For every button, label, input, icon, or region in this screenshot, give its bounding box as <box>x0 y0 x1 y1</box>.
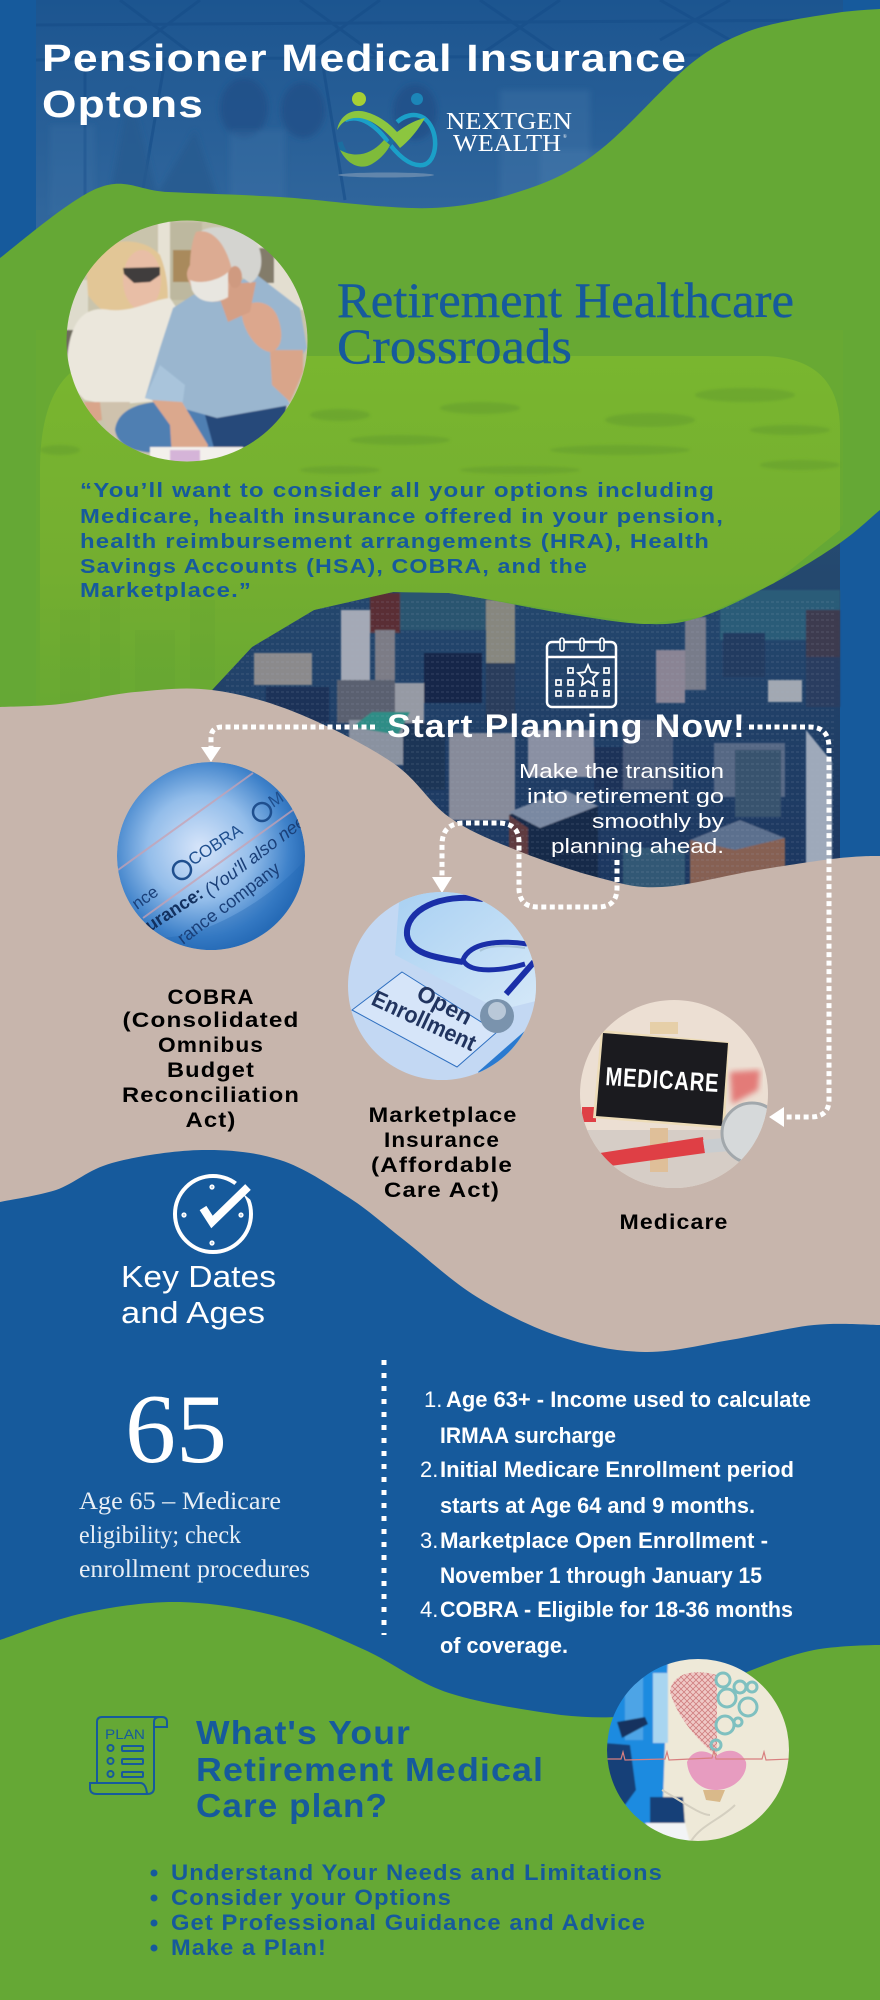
bulleted plan list <box>150 1860 663 1960</box>
key dates list: IRMAA surcharge <box>440 1423 616 1448</box>
quote text <box>80 479 724 602</box>
photo: COBRA form: nce <box>128 882 162 913</box>
quote text: Marketplace.” <box>80 579 252 602</box>
dotted arrow: to Medicare <box>749 727 829 1127</box>
photo: open enrollment <box>345 890 540 1085</box>
dotted divider <box>382 1360 386 1635</box>
key dates list: 4. <box>420 1597 438 1622</box>
heading: What's Your Retirement Medical Care plan?: What's Your <box>196 1714 411 1751</box>
bulleted plan list: Get Professional Guidance and Advice <box>171 1910 646 1935</box>
key dates list: 1. <box>424 1387 442 1412</box>
header stage photo with blue tint <box>36 0 843 265</box>
icon: plan scroll <box>90 1717 167 1794</box>
bulleted plan list: Make a Plan! <box>171 1935 327 1960</box>
text: planning ahead: smoothly by <box>592 811 724 833</box>
photo: COBRA form: M <box>265 788 287 811</box>
icon: plan scroll: PLAN <box>105 1726 145 1742</box>
beige wave panel <box>0 688 880 1370</box>
logo: NextGen Wealth <box>337 92 572 178</box>
label: Marketplace Insurance: Marketplace <box>368 1104 518 1127</box>
title: Pensioner Medical Insurance <box>42 38 687 80</box>
key dates list: starts at Age 64 and 9 months. <box>440 1493 755 1518</box>
translucent rounded panel with cloud streaks <box>40 356 840 710</box>
label: Marketplace Insurance: Care Act) <box>384 1179 500 1202</box>
text: age 65 note: enrollment procedures <box>79 1556 310 1583</box>
photo: COBRA form: rance company <box>173 858 284 948</box>
quote text: Medicare, health insurance offered in your pension, <box>80 505 724 528</box>
key dates list: Age 63+ - Income used to calculate <box>446 1387 811 1412</box>
label: Marketplace Insurance <box>368 1104 518 1202</box>
quote text: Savings Accounts (HSA), COBRA, and the <box>80 555 588 578</box>
text: planning ahead: Make the transition <box>519 761 724 783</box>
text: age 65 note: eligibility; check <box>79 1522 241 1549</box>
icon: clock with check <box>175 1176 256 1252</box>
key dates list: of coverage. <box>440 1633 568 1658</box>
bulleted plan list: Understand Your Needs and Limitations <box>171 1860 663 1885</box>
heading: Retirement Healthcare Crossroads <box>337 272 794 374</box>
photo: retired couple <box>66 220 308 462</box>
bottom green wave panel <box>0 1602 880 2000</box>
key dates list: Marketplace Open Enrollment - <box>440 1528 768 1553</box>
heading: What's Your Retirement Medical Care plan?: Retirement Medical <box>196 1751 544 1788</box>
big number 65: 65 <box>125 1375 227 1484</box>
photo: open enrollment: Enrollment <box>368 985 481 1056</box>
green wave panel <box>0 9 880 730</box>
quote text: “You’ll want to consider all your options including <box>80 479 715 502</box>
text: age 65 note <box>79 1488 310 1583</box>
label: COBRA: Omnibus <box>158 1034 264 1057</box>
label: COBRA: Budget <box>167 1059 255 1082</box>
label: COBRA: (Consolidated <box>122 1009 300 1032</box>
heading: What's Your Retirement Medical Care plan?: Care plan? <box>196 1787 388 1824</box>
title <box>42 38 687 126</box>
heading: Key Dates and Ages <box>121 1259 276 1330</box>
city skyline photo <box>200 540 840 900</box>
key dates list: Initial Medicare Enrollment period <box>440 1457 794 1482</box>
heading: What's Your Retirement Medical Care plan? <box>196 1714 544 1824</box>
label: Marketplace Insurance: Insurance <box>384 1129 500 1152</box>
dotted arrow: to COBRA <box>201 727 375 762</box>
photo: COBRA form <box>117 762 318 950</box>
logo: NextGen Wealth: ® <box>563 134 567 140</box>
photo: open enrollment: Open <box>413 979 477 1030</box>
text: planning ahead: into retirement go <box>527 786 724 808</box>
heading: Retirement Healthcare Crossroads: Retirement Healthcare <box>337 272 794 328</box>
text: age 65 note: Age 65 – Medicare <box>79 1488 281 1515</box>
photo: Medicare sign <box>580 1000 768 1188</box>
dotted arrow: to Marketplace <box>432 823 617 907</box>
text: planning ahead <box>519 761 724 858</box>
quote text: health reimbursement arrangements (HRA), Health <box>80 530 710 553</box>
photo: COBRA form: (You'll also need <box>200 804 318 900</box>
heading: Retirement Healthcare Crossroads: Crossroads <box>337 318 572 374</box>
heading: Key Dates and Ages: and Ages <box>121 1295 265 1330</box>
label: COBRA: COBRA <box>168 986 254 1009</box>
heading: Key Dates and Ages: Key Dates <box>121 1259 276 1294</box>
key dates list: COBRA - Eligible for 18-36 months <box>440 1597 793 1622</box>
logo: NextGen Wealth: NEXTGEN <box>446 109 572 135</box>
photo: COBRA form: COBRA <box>185 820 246 869</box>
key dates list: 2. <box>420 1457 438 1482</box>
key dates list: November 1 through January 15 <box>440 1563 762 1588</box>
label: COBRA <box>122 986 300 1132</box>
bulleted plan list: Consider your Options <box>171 1885 452 1910</box>
photo: Medicare sign: MEDICARE <box>605 1061 720 1098</box>
photo: medical heart hand <box>605 1657 791 1843</box>
key dates list <box>420 1387 811 1658</box>
heading: Start Planning Now!: Start Planning Now! <box>387 708 746 744</box>
label: Medicare: Medicare <box>620 1211 728 1234</box>
icon: calendar with star <box>547 638 616 707</box>
key dates list: 3. <box>420 1528 438 1553</box>
photo: COBRA form: urance: <box>141 883 207 935</box>
logo: NextGen Wealth: WEALTH <box>453 131 561 157</box>
label: COBRA: Act) <box>186 1109 236 1132</box>
label: COBRA: Reconciliation <box>122 1084 300 1107</box>
title: Optons <box>42 84 204 126</box>
blue wave panel <box>0 1150 880 1720</box>
text: planning ahead: planning ahead. <box>551 836 724 858</box>
label: Marketplace Insurance: (Affordable <box>371 1154 513 1177</box>
